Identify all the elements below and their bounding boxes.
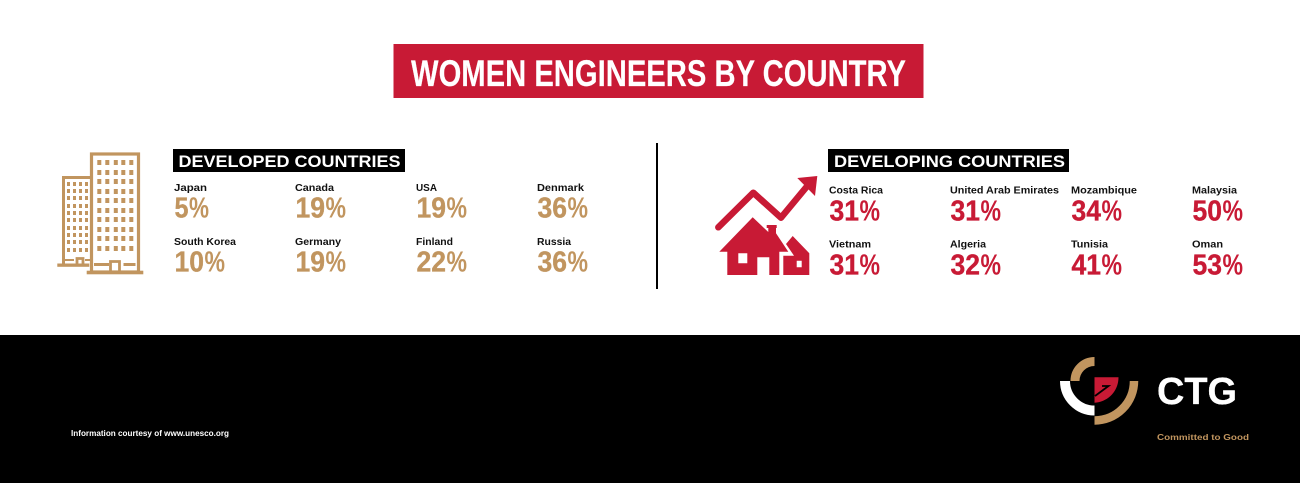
stat: USA (416, 183, 467, 224)
stat: Oman (1192, 240, 1243, 282)
stat: Denmark: Denmark (537, 183, 584, 194)
stat: United Arab Emirates: United Arab Emirates (950, 186, 1059, 196)
stat: USA: % (446, 192, 467, 224)
stat: Vietnam: % (860, 250, 880, 282)
stat: Costa Rica (829, 186, 883, 228)
stat: Algeria: Algeria (950, 240, 986, 250)
stat: Costa Rica: 31 (830, 196, 859, 228)
stat: Canada: 19 (296, 192, 325, 224)
stat: Mozambique: Mozambique (1071, 186, 1137, 196)
stat: Vietnam: Vietnam (829, 240, 871, 250)
logo: CTG: CTG (1157, 371, 1237, 413)
stat: Japan (174, 183, 209, 224)
stat: Oman: % (1222, 250, 1243, 282)
stat: South Korea (174, 237, 236, 278)
stat: Canada (295, 183, 346, 224)
title: WOMEN ENGINEERS BY COUNTRY (411, 52, 906, 94)
stat: Denmark (537, 183, 588, 224)
stat: Malaysia: % (1222, 196, 1243, 228)
stat: Tunisia: Tunisia (1071, 240, 1108, 250)
panel: developed country statistics (174, 183, 588, 278)
stat: Russia (537, 237, 588, 278)
stat: United Arab Emirates: % (980, 196, 1001, 228)
stat: Tunisia: 41 (1072, 250, 1101, 282)
stat: Costa Rica: % (860, 196, 880, 228)
icon: office buildings (57, 154, 143, 274)
stat: United Arab Emirates: 31 (950, 196, 980, 228)
stat: Russia: Russia (537, 237, 571, 248)
stat: Finland: Finland (416, 237, 453, 248)
stat: Germany: Germany (295, 237, 341, 248)
stat: Russia: % (568, 246, 588, 278)
stat: South Korea: % (204, 246, 225, 278)
stat: USA: USA (416, 183, 438, 194)
source note: Information courtesy of www.unesco.org (71, 429, 229, 438)
stat: Costa Rica: Costa Rica (829, 186, 883, 196)
stat: South Korea: South Korea (174, 237, 236, 248)
stat: Denmark: 36 (538, 192, 567, 224)
stat: Germany: 19 (296, 246, 325, 278)
stat: Oman: Oman (1192, 240, 1223, 250)
stat: Japan: Japan (174, 183, 207, 194)
stat: Germany (295, 237, 346, 278)
stat: Denmark: % (568, 192, 588, 224)
stat: Finland: 22 (416, 246, 446, 278)
panel: developing country statistics (829, 186, 1243, 282)
stat: Tunisia (1071, 240, 1122, 282)
stat: Oman: 53 (1192, 250, 1222, 282)
stat: Algeria (950, 240, 1001, 282)
stat: Vietnam: 31 (830, 250, 859, 282)
stat: USA: 19 (416, 192, 446, 224)
heading: developed countries: DEVELOPED COUNTRIES (178, 152, 400, 171)
title (394, 44, 924, 98)
stat: Algeria: % (980, 250, 1001, 282)
stat: Mozambique: 34 (1072, 196, 1101, 228)
stat: Mozambique: % (1102, 196, 1122, 228)
stat: United Arab Emirates (950, 186, 1059, 228)
stat: South Korea: 10 (174, 246, 204, 278)
stat: Algeria: 32 (950, 250, 980, 282)
heading: developing countries: DEVELOPING COUNTRIES (834, 152, 1065, 171)
stat: Japan: 5 (174, 192, 189, 224)
stat: Germany: % (326, 246, 346, 278)
stat: Mozambique (1071, 186, 1137, 228)
stat: Malaysia (1192, 186, 1243, 228)
stat: Japan: % (189, 192, 209, 224)
logo: CTG: Committed to Good (1157, 432, 1249, 442)
icon: houses with rising arrow (718, 176, 817, 275)
stat: Vietnam (829, 240, 880, 282)
stat: Malaysia: 50 (1192, 196, 1222, 228)
logo: CTG (1065, 362, 1249, 442)
stat: Canada: Canada (295, 183, 334, 194)
stat: Russia: 36 (538, 246, 567, 278)
stat: Finland (416, 237, 467, 278)
stat: Malaysia: Malaysia (1192, 186, 1237, 196)
stat: Canada: % (326, 192, 346, 224)
stat: Tunisia: % (1102, 250, 1122, 282)
stat: Finland: % (446, 246, 467, 278)
